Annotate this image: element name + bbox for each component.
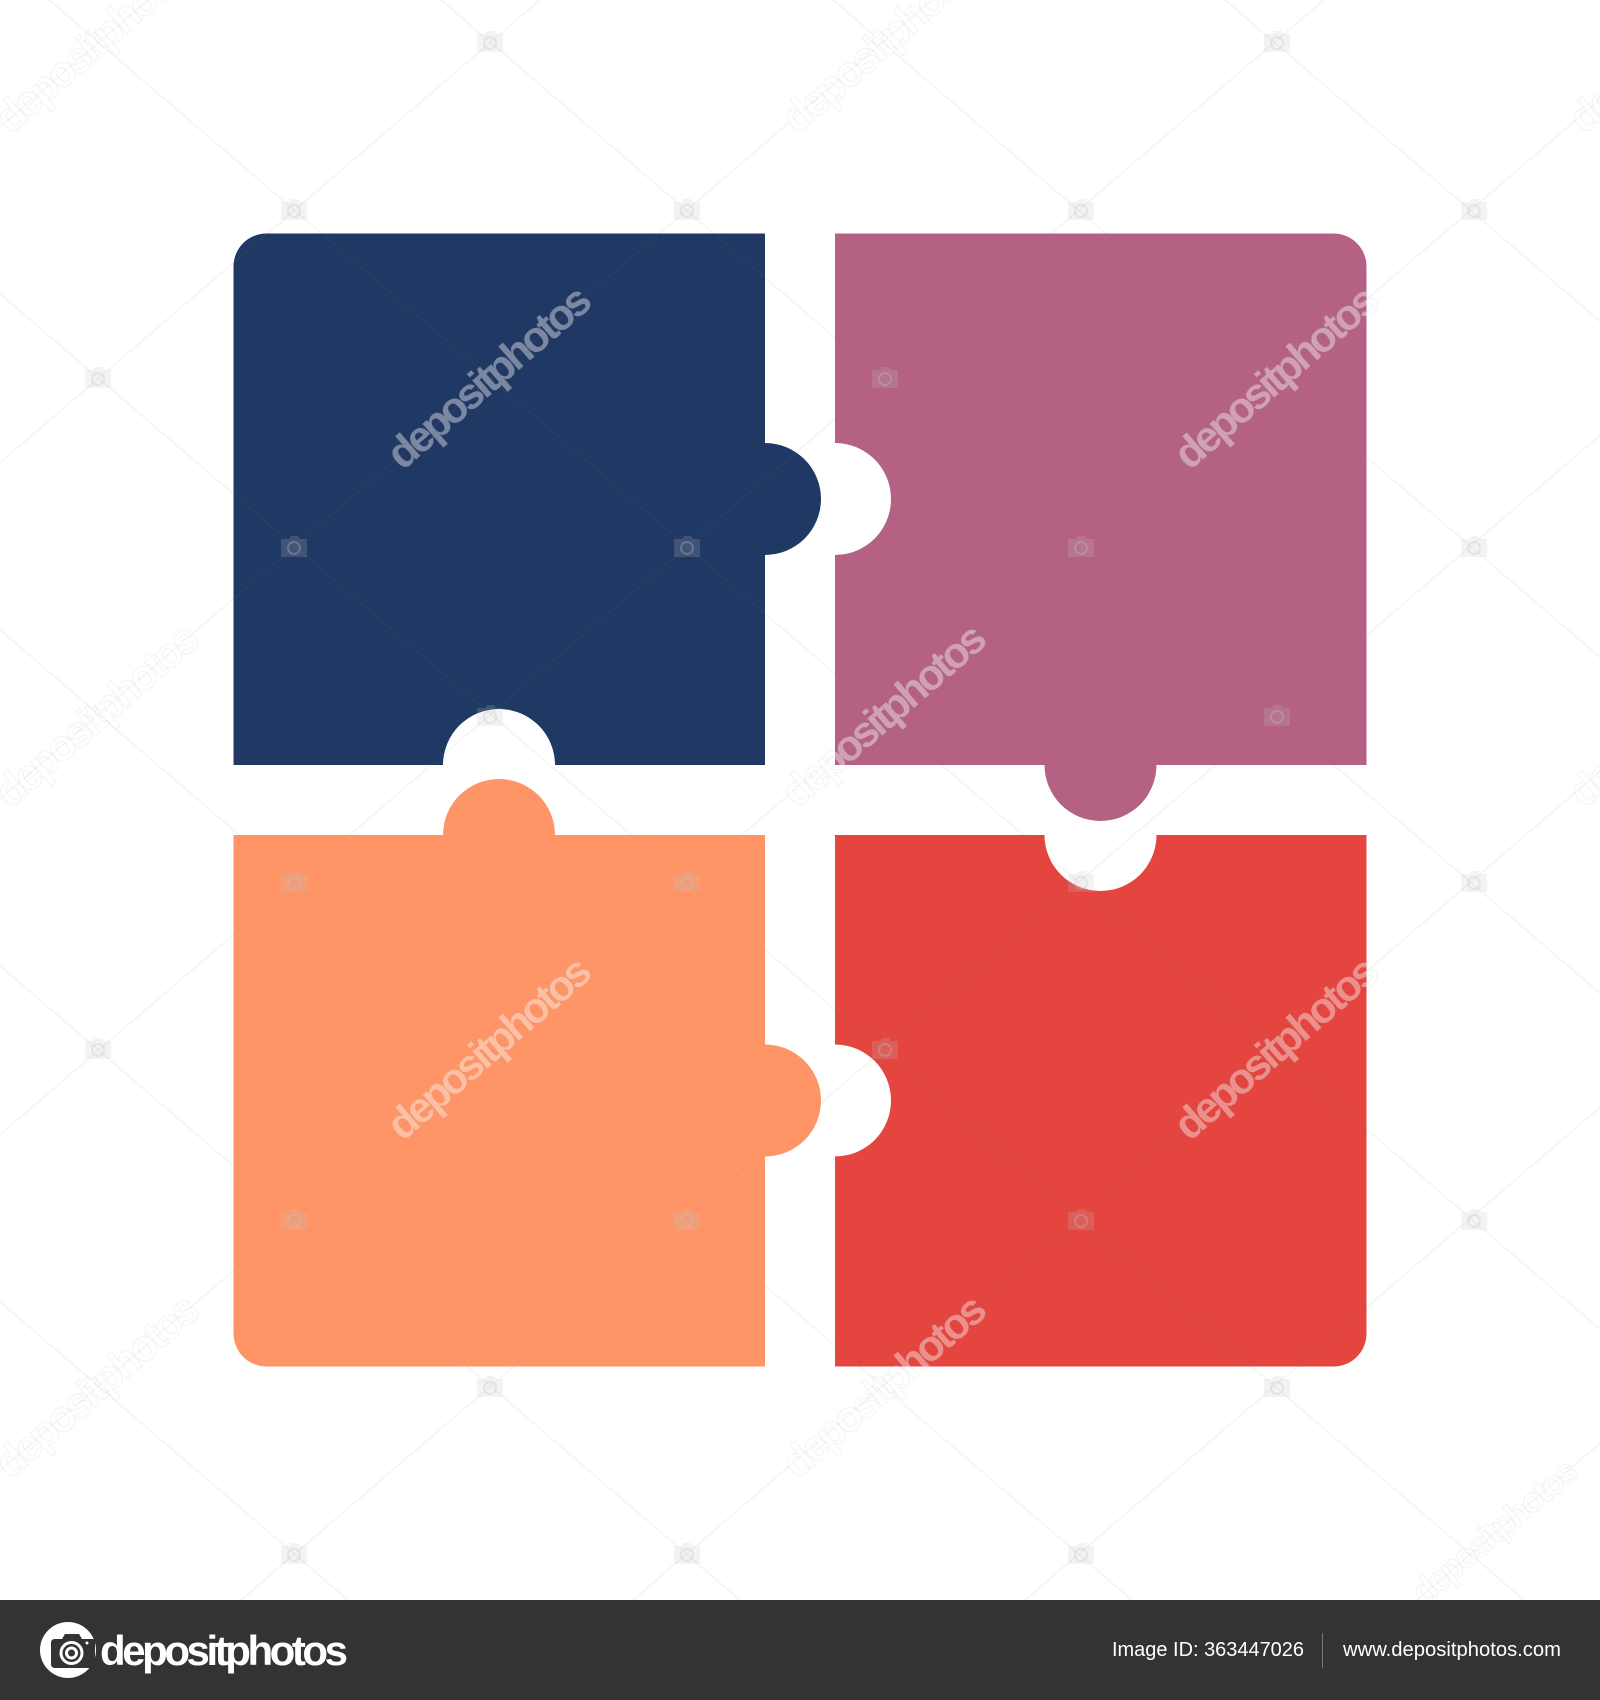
icon: depositphotos camera logo bbox=[40, 1622, 96, 1678]
puzzle piece: red bottom right bbox=[835, 835, 1366, 1366]
watermark: repeated depositphotos text: depositphotos bbox=[378, 947, 601, 1150]
puzzle piece: navy top left bbox=[234, 234, 821, 765]
watermark: repeated depositphotos text: depositphotos bbox=[1404, 1451, 1585, 1612]
image id: Image ID: 363447026 bbox=[1112, 1639, 1304, 1661]
watermark: repeated depositphotos text: depositphotos bbox=[773, 1285, 996, 1488]
puzzle piece: mauve top right bbox=[835, 234, 1366, 821]
watermark: repeated depositphotos text: depositphotos bbox=[773, 614, 996, 817]
logo wordmark: depositphotos bbox=[100, 1627, 348, 1674]
watermark: repeated depositphotos text: depositphotos bbox=[1165, 947, 1388, 1150]
watermark: repeated depositphotos text: depositphotos bbox=[378, 276, 601, 479]
watermark: repeated depositphotos text: depositphotos bbox=[1165, 276, 1388, 479]
puzzle piece: orange bottom left bbox=[234, 779, 821, 1366]
website url: www.depositphotos.com bbox=[1342, 1639, 1561, 1661]
footer bar bbox=[0, 1600, 1600, 1700]
watermark: repeated camera icons bbox=[85, 31, 1487, 1564]
